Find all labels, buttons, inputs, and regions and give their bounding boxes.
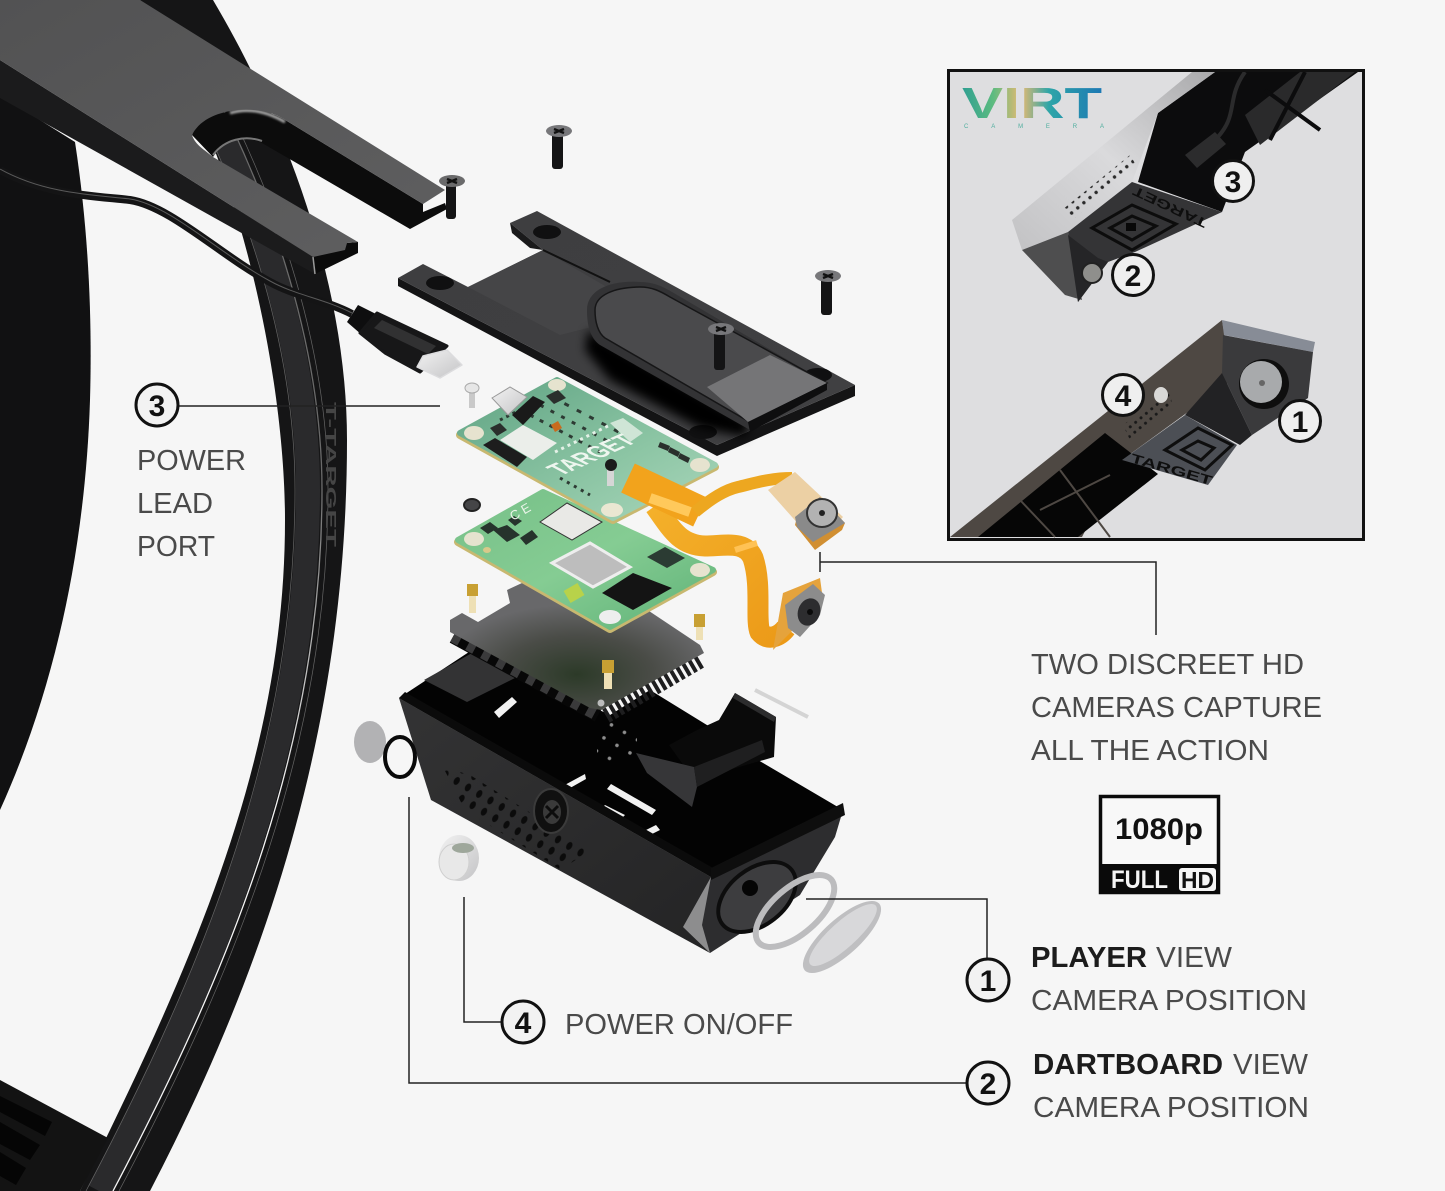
USB-C plug boot (347, 305, 378, 335)
cover shadow (585, 330, 750, 437)
label: two HD cameras (1031, 649, 1322, 767)
dartboard surround: inner black arc (0, 95, 91, 810)
leader line: player view (806, 899, 987, 960)
marker 3: 3 (149, 390, 165, 423)
marker 2 (967, 1062, 1009, 1104)
label: power lead port: LEAD (137, 488, 213, 520)
arm top face (0, 0, 445, 257)
thermal plate (450, 583, 704, 716)
camera module: upper (768, 472, 845, 550)
pale block (610, 418, 643, 442)
interior slots (561, 774, 660, 838)
badge: 1080p full HD: 1080p (1115, 813, 1203, 846)
housing side face (399, 698, 711, 953)
O ring (385, 737, 415, 777)
SD slot (500, 425, 557, 460)
inset marker 1 (1280, 400, 1320, 442)
label: dartboard view: DARTBOARD (1033, 1049, 1223, 1081)
inset upper: silver body (1012, 72, 1215, 250)
black connector (483, 438, 527, 467)
inset lower: grille plate (1122, 415, 1237, 485)
screw: cover (708, 323, 734, 370)
inset marker 3 (1212, 160, 1254, 202)
USB-C plug body (360, 313, 447, 372)
label: power lead port: PORT (137, 531, 215, 563)
leader line: cameras (820, 552, 1156, 635)
small pin (755, 690, 808, 717)
inner clip tower (669, 693, 776, 780)
power board upper (460, 379, 715, 520)
power chips (480, 516, 538, 545)
label: dartboard view: CAMERA POSITION (1033, 1092, 1309, 1124)
USB socket (492, 387, 527, 415)
inset panel: camera close-ups (948, 70, 1364, 540)
housing top-left ledge (424, 653, 515, 702)
marker 3 (136, 384, 178, 426)
label: power lead port (137, 445, 246, 563)
inset marker 2: 2 (1125, 260, 1141, 293)
logo (962, 79, 1104, 130)
leader line: dartboard view (409, 797, 967, 1083)
mounting arm bracket (0, 0, 447, 274)
raised cover oval (587, 282, 827, 430)
brass standoff: right (694, 614, 705, 640)
inset marker 4 (1102, 374, 1144, 416)
leader line: power lead port (178, 405, 440, 407)
badge: 1080p full HD (1099, 796, 1220, 894)
ring lettering: T-TARGET (322, 402, 339, 547)
label: two HD cameras: TWO DISCREET HD (1031, 649, 1304, 681)
inset marker 2 (1112, 254, 1154, 296)
inset lower: front face (1222, 335, 1313, 435)
label: two HD cameras: CAMERAS CAPTURE (1031, 692, 1322, 724)
marker 2: 2 (980, 1068, 996, 1101)
silver chip (540, 503, 602, 540)
screw: right (815, 270, 841, 315)
brass standoff: centre (602, 660, 614, 689)
inset lower: lens (1239, 359, 1289, 409)
screw: arm (439, 175, 465, 219)
inset lower: button (1154, 387, 1168, 403)
marker 1 (967, 959, 1009, 1001)
logo: CAMERA (964, 124, 1104, 130)
lens disc (354, 721, 386, 763)
dartboard lower left bracket (0, 1080, 108, 1191)
housing front face (683, 810, 843, 953)
board label: TARGET (540, 431, 644, 479)
label: player view (1031, 942, 1307, 1017)
cover plate (398, 211, 855, 456)
inset lower: grille lettering: TARGET (1129, 450, 1214, 488)
housing interior (399, 650, 843, 877)
marker 1: 1 (980, 965, 996, 998)
side power recess (534, 789, 568, 833)
washer (464, 499, 480, 511)
black memory chip (602, 573, 672, 610)
small components (490, 390, 690, 463)
front lens (705, 848, 809, 946)
marker 4 (502, 1001, 544, 1043)
processor lid (552, 543, 630, 587)
inset lower: arm (950, 320, 1232, 537)
dartboard surround: outer ring (80, 0, 347, 1191)
inset upper: upside-down lettering: TARGET (1130, 183, 1209, 231)
front lens cover (793, 890, 891, 984)
CE mark: C E (507, 500, 534, 524)
camera housing (399, 650, 845, 953)
inset upper: cable (1215, 72, 1245, 140)
inset upper: arm underside (1138, 72, 1358, 212)
camera module: lower (773, 578, 825, 650)
compute board lower (458, 492, 713, 629)
badge: 1080p full HD: FULL (1111, 866, 1168, 894)
badge: 1080p full HD: HD (1181, 867, 1214, 893)
side vent holes (443, 767, 590, 870)
inset marker 3: 3 (1225, 166, 1241, 199)
label: player view: VIEW (1156, 942, 1233, 974)
logo: VIRT (962, 79, 1102, 128)
label: player view: CAMERA POSITION (1031, 985, 1307, 1017)
screw: top (546, 125, 572, 169)
inset upper: dark face (1068, 182, 1222, 302)
silver screw (465, 383, 479, 408)
label: dartboard view (1033, 1049, 1309, 1124)
brass standoff: left (467, 584, 478, 613)
component rows (500, 397, 630, 495)
label: two HD cameras: ALL THE ACTION (1031, 735, 1269, 767)
inset marker 1: 1 (1292, 406, 1308, 439)
label: player view: PLAYER (1031, 942, 1147, 974)
inset upper: lens (1082, 263, 1102, 283)
label: power lead port: POWER (137, 445, 246, 477)
pin grid (597, 722, 637, 762)
inset lower: top strip (1222, 320, 1315, 352)
arm slot inner wall (192, 110, 447, 229)
label: dartboard view: VIEW (1233, 1049, 1309, 1081)
qr code (564, 583, 584, 603)
power cable (0, 169, 462, 378)
label: power on/off: POWER ON/OFF (565, 1009, 793, 1041)
small chip (647, 547, 685, 568)
inset upper: vent pattern (1092, 205, 1176, 250)
front lens ring (744, 862, 846, 960)
power button (439, 835, 479, 881)
marker 4: 4 (515, 1007, 532, 1040)
inset marker 4: 4 (1115, 380, 1132, 413)
screw on ribbon (605, 459, 617, 486)
USB-C plug metal (417, 350, 462, 378)
leader line: power button (464, 897, 502, 1022)
ribbon cable (628, 478, 792, 637)
